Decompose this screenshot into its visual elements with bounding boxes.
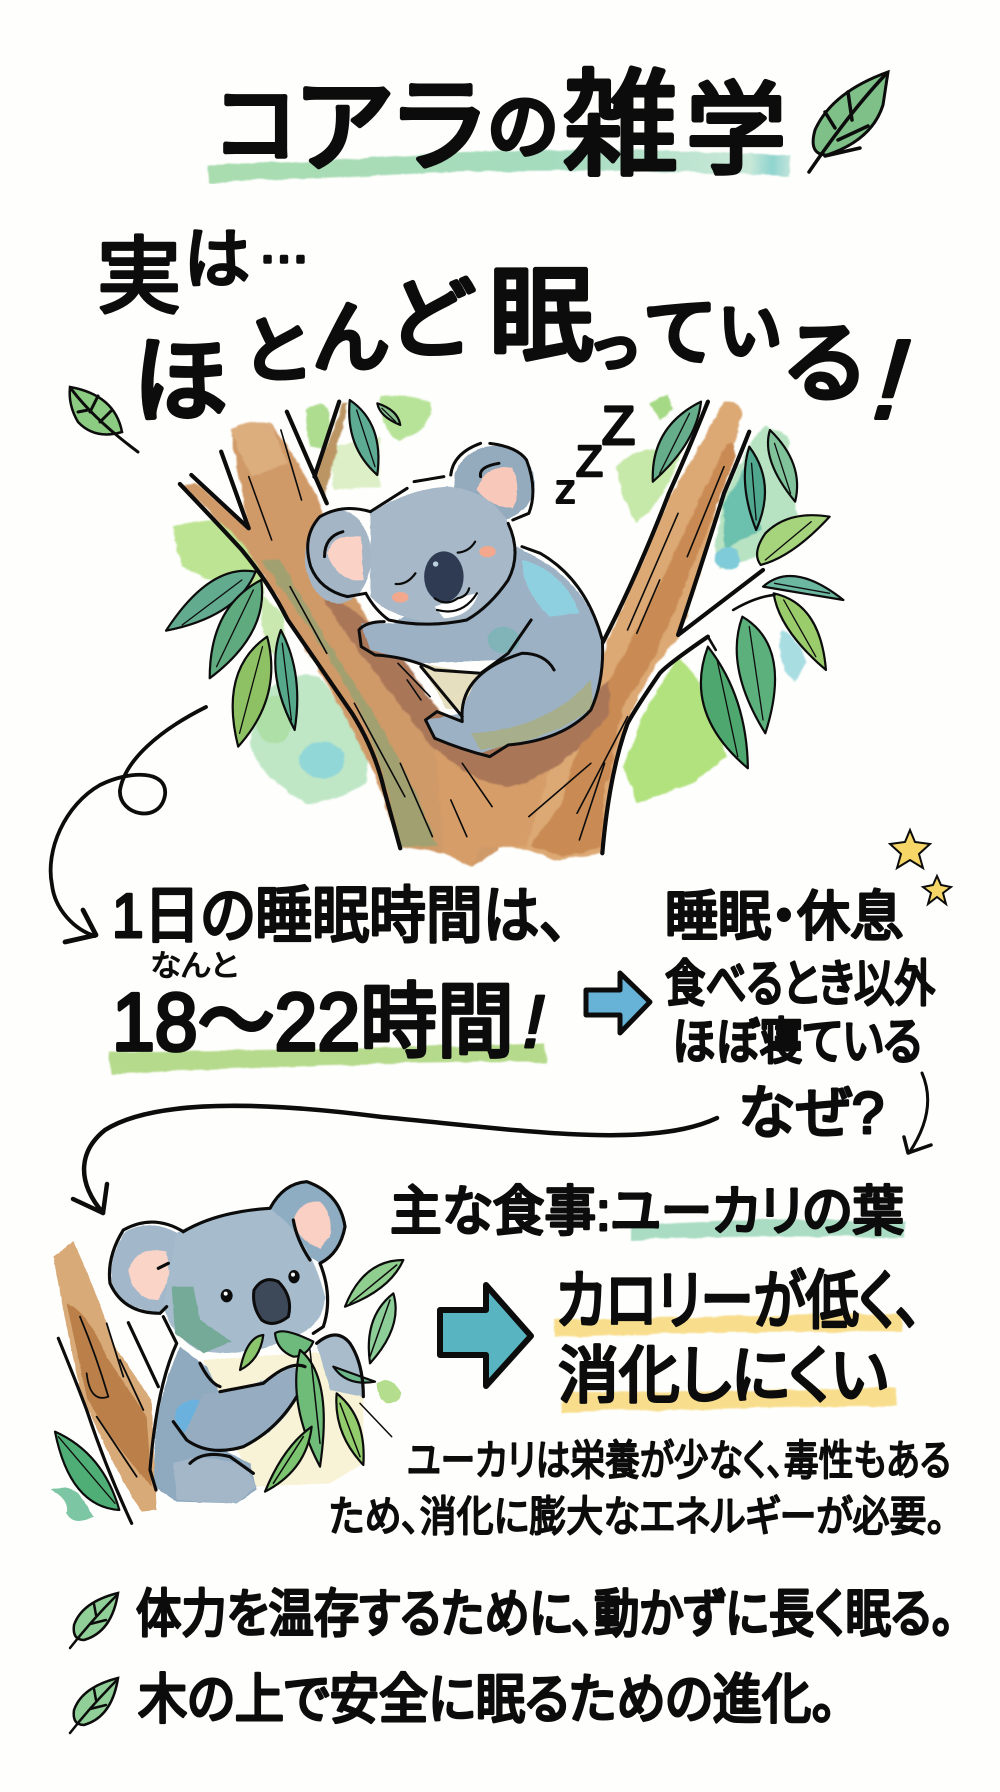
face	[221, 1270, 300, 1323]
text: main diet: 主な食事:ユーカリの葉	[390, 1182, 904, 1242]
illustration: koala eating leaves	[51, 1182, 403, 1523]
koala body	[361, 547, 603, 753]
headline: ほとんど眠っている！: !	[859, 318, 926, 443]
title: ア	[293, 71, 395, 185]
text: sleep hours line 1: 1日の睡眠時間は、	[112, 882, 568, 951]
small leaf blob	[377, 1380, 402, 1403]
koala head	[370, 487, 514, 623]
headline: ほとんど眠っている！: る	[781, 314, 869, 413]
zzz sleep letters: Z	[602, 396, 635, 456]
text: hard to digest: 消化しにくい	[558, 1342, 888, 1411]
stars	[890, 830, 951, 904]
headline: ほとんど眠っている！: 眠	[489, 259, 593, 375]
trunk washes	[182, 402, 742, 867]
title: コ	[212, 78, 298, 174]
arrow: big teal	[440, 1285, 531, 1386]
held leaves	[240, 1260, 403, 1492]
ears	[111, 1183, 344, 1312]
text: なんと: なんと	[150, 950, 238, 983]
icon: title leaf	[809, 72, 888, 172]
ground leaves	[51, 1432, 119, 1521]
head	[163, 1208, 325, 1353]
arrow: long wave	[73, 1106, 717, 1213]
text: low calorie: カロリーが低く、	[556, 1265, 922, 1337]
koala face	[392, 542, 496, 618]
title: 雑	[563, 62, 678, 190]
icon: bullet leaf 2	[70, 1678, 118, 1733]
title: ラ	[388, 70, 490, 184]
headline: ほとんど眠っている！: ん	[312, 294, 390, 382]
subheading: 実は…: 実	[97, 230, 181, 324]
body	[154, 1337, 363, 1503]
text: なぜ？: なぜ?	[738, 1081, 884, 1146]
illustration: sleeping koala in tree	[166, 394, 843, 867]
arrow: loop to sleep text	[51, 707, 206, 942]
highlight: yellow 1	[554, 1314, 903, 1337]
arrow: small down	[904, 1073, 931, 1153]
title: の	[487, 88, 559, 168]
trunk	[53, 1242, 157, 1512]
icon: bullet leaf 1	[70, 1593, 118, 1648]
text: almost asleep: ほぼ寝ている	[672, 1014, 922, 1070]
text: 18〜22時間!: 18～22時間	[112, 977, 514, 1068]
zzz sleep letters: z	[555, 465, 576, 512]
koala ears	[305, 446, 535, 603]
trunk ink outlines	[180, 402, 763, 853]
head patch	[172, 1287, 232, 1353]
headline: ほとんど眠っている！: て	[643, 291, 717, 374]
text: 18〜22時間!: !	[516, 980, 554, 1063]
headline: ほとんど眠っている！: っ	[588, 318, 642, 378]
headline: ほとんど眠っている！	[133, 259, 926, 443]
text: bullet 2: 木の上で安全に眠るための進化。	[138, 1670, 836, 1730]
text: except when eating: 食べるとき以外	[665, 956, 935, 1012]
watercolor foliage background	[173, 394, 807, 803]
heading underline wash	[208, 150, 790, 182]
koala ink outlines	[308, 443, 603, 757]
subheading: 実は…: …	[258, 216, 310, 274]
highlight: yellow 2	[562, 1388, 896, 1412]
headline: ほとんど眠っている！: ど	[388, 270, 476, 369]
icon: left leaf	[70, 387, 138, 452]
arrow: blue	[586, 973, 650, 1033]
highlight: eucalyptus underline	[632, 1220, 905, 1240]
text: sleep and rest: 睡眠・休息	[665, 887, 903, 947]
leaves	[166, 400, 843, 768]
zzz sleep letters	[555, 396, 635, 512]
headline: ほとんど眠っている！: ほ	[133, 329, 228, 435]
highlight: green underline	[110, 1043, 546, 1074]
headline: ほとんど眠っている！: い	[718, 296, 782, 368]
hands and ink outlines	[109, 1182, 397, 1490]
zzz sleep letters: Z	[576, 437, 603, 486]
title: 学	[686, 75, 786, 187]
headline: ほとんど眠っている！: と	[242, 312, 314, 392]
subheading: 実は…: は	[184, 222, 250, 296]
